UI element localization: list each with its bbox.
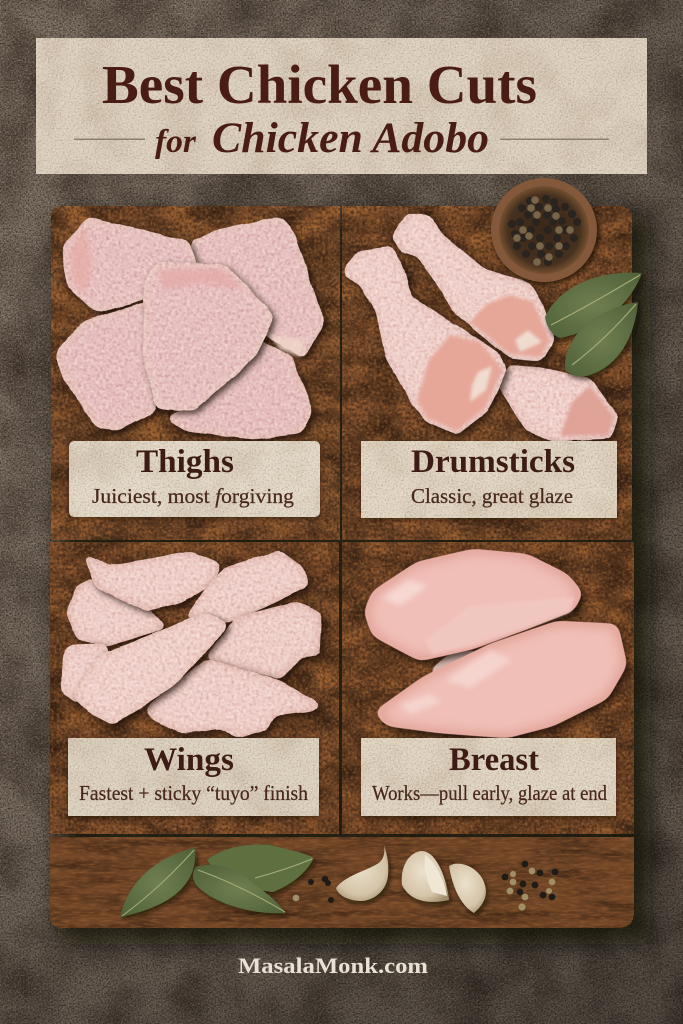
plank wood bbox=[50, 837, 634, 928]
icon: peppercorn bowl bbox=[491, 178, 600, 285]
panel: drumsticks bbox=[342, 178, 642, 540]
icon: bay leaves bottom bbox=[120, 844, 314, 917]
breast label card: Works—pull early, glaze at end bbox=[372, 781, 607, 805]
title banner: Chicken Adobo bbox=[212, 115, 489, 162]
panel: bottom plank with aromatics bbox=[50, 837, 634, 928]
wings label card bbox=[68, 738, 319, 816]
cutting board shadow bbox=[58, 216, 650, 944]
thighs label card bbox=[69, 441, 320, 517]
drumsticks label card: Classic, great glaze bbox=[411, 484, 573, 508]
panel: thighs bbox=[51, 206, 340, 540]
wings label card: Wings bbox=[144, 742, 234, 778]
drumsticks label card: Drumsticks bbox=[411, 444, 575, 480]
footer brand: MasalaMonk.com bbox=[238, 953, 428, 978]
panel: breast bbox=[342, 542, 634, 834]
panel: wings bbox=[50, 542, 339, 834]
title banner bbox=[36, 38, 647, 174]
thighs label card: Thighs bbox=[136, 444, 234, 480]
thighs label card: Juiciest, most forgiving bbox=[92, 484, 295, 508]
title banner: Best Chicken Cuts bbox=[102, 54, 537, 115]
drumsticks chicken pieces bbox=[345, 215, 617, 440]
wings label card: Fastest + sticky “tuyo” finish bbox=[79, 781, 308, 805]
breast label card: Breast bbox=[449, 742, 539, 778]
breast chicken pieces bbox=[365, 550, 626, 737]
drumsticks label card bbox=[361, 441, 617, 518]
wings chicken pieces bbox=[63, 552, 320, 737]
breast wood board bbox=[342, 542, 634, 834]
breast label card bbox=[361, 738, 616, 816]
icon: bay leaves top right bbox=[545, 273, 642, 376]
icon: scattered peppercorns bbox=[293, 861, 558, 911]
title banner: for bbox=[155, 124, 197, 160]
wings wood board bbox=[50, 542, 339, 834]
thighs chicken pieces bbox=[57, 218, 323, 438]
thighs wood board bbox=[51, 206, 340, 540]
drumsticks wood board bbox=[342, 206, 632, 540]
icon: garlic cloves bbox=[336, 845, 486, 913]
